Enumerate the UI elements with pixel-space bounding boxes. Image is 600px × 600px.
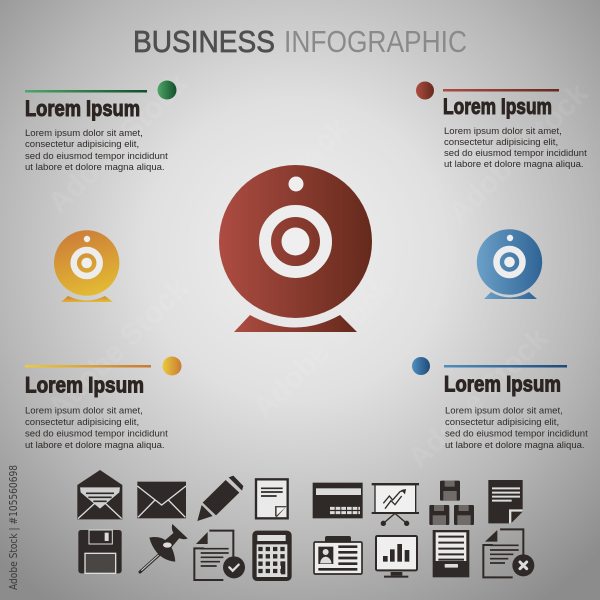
blue dot	[412, 357, 430, 375]
panel: top left text	[25, 80, 176, 173]
icon: orange webcam	[54, 230, 119, 302]
title: INFOGRAPHIC	[284, 24, 467, 59]
heading: Lorem Ipsum	[25, 96, 140, 121]
body text: Lorem ipsum dolor sit amet,	[25, 406, 143, 416]
icon: floppy disk	[78, 530, 122, 573]
body text: ut labore et dolore magna aliqua.	[444, 159, 584, 170]
heading: Lorem Ipsum	[444, 372, 561, 396]
body text: ut labore et dolore magna aliqua.	[445, 440, 585, 451]
green rule	[25, 90, 147, 92]
text: Adobe Stock	[42, 67, 195, 220]
body text: Lorem ipsum dolor sit amet,	[444, 126, 562, 137]
icon: calculator	[252, 531, 292, 581]
yellow rule	[25, 365, 151, 368]
panel: top right text	[416, 82, 587, 170]
body text: sed do eiusmod tempor incididunt	[445, 428, 588, 440]
icon: pencil	[197, 476, 243, 521]
text: Adobe Stock	[202, 112, 355, 265]
text: Adobe Stock	[402, 322, 555, 475]
red dot	[416, 82, 434, 100]
green dot	[158, 80, 176, 100]
icon: document check	[194, 531, 245, 580]
body text: sed do eiusmod tempor incididunt	[444, 148, 587, 159]
heading: Lorem Ipsum	[443, 94, 552, 119]
body text	[445, 406, 588, 451]
text: Adobe Stock	[247, 272, 400, 425]
icon row group: left	[77, 470, 292, 581]
icon: note	[256, 479, 288, 518]
body text	[25, 406, 168, 451]
icon: push pin	[140, 524, 188, 572]
body text: Lorem ipsum dolor sit amet,	[445, 406, 563, 416]
icon: document tray	[433, 530, 469, 577]
body text: Lorem ipsum dolor sit amet,	[25, 128, 143, 139]
icon: large red webcam	[219, 165, 372, 332]
panel: bottom right text	[412, 357, 588, 451]
body text: sed do eiusmod tempor incididunt	[25, 428, 168, 440]
body text: consectetur adipisicing elit,	[445, 417, 559, 428]
icon: presentation board	[372, 483, 419, 526]
body text	[25, 128, 168, 173]
blue rule	[444, 365, 567, 368]
body text: consectetur adipisicing elit,	[25, 417, 139, 428]
icon: blue webcam	[477, 229, 542, 299]
body text: sed do eiusmod tempor incididunt	[25, 151, 168, 162]
title: BUSINESS	[133, 24, 275, 59]
icon: document delete	[483, 529, 534, 577]
icon: credit card	[313, 483, 363, 518]
stock id: Adobe Stock | #105560698	[7, 465, 20, 590]
yellow dot	[162, 356, 182, 376]
panel: bottom left text	[25, 356, 182, 451]
icon: closed envelope	[137, 482, 186, 518]
body text: consectetur adipisicing elit,	[444, 137, 558, 148]
icon: open envelope	[77, 470, 122, 519]
icon row group: right	[313, 480, 534, 578]
text: Adobe Stock	[442, 77, 595, 230]
body text: ut labore et dolore magna aliqua.	[25, 162, 165, 173]
body text: ut labore et dolore magna aliqua.	[25, 440, 165, 451]
heading: Lorem Ipsum	[25, 372, 144, 398]
body text	[444, 126, 587, 170]
icon: dark document	[488, 480, 523, 523]
icon: ID badge	[314, 536, 362, 574]
icon: monitor chart	[376, 536, 417, 578]
red rule	[443, 89, 559, 92]
title	[133, 24, 467, 59]
text: Adobe Stock	[42, 272, 195, 425]
body text: consectetur adipisicing elit,	[25, 139, 139, 150]
icon: three floppies	[429, 481, 474, 525]
